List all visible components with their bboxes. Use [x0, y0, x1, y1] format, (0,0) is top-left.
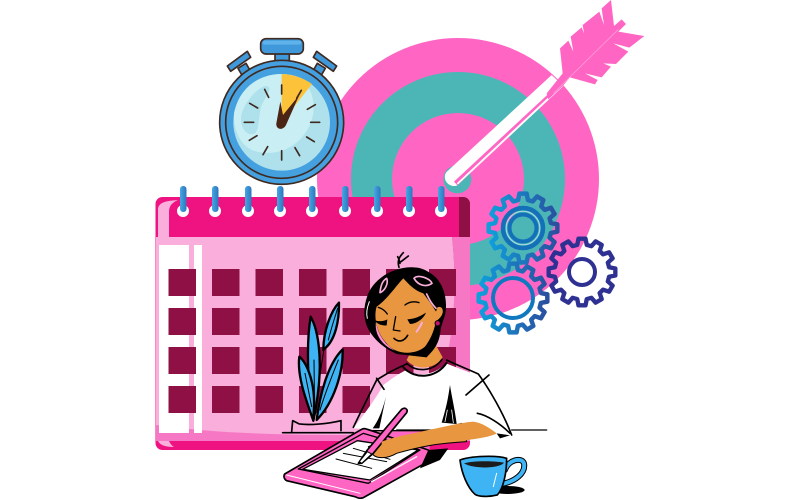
gear: right	[549, 239, 615, 305]
arrow	[443, 0, 644, 193]
plant	[283, 303, 353, 433]
calendar	[156, 186, 470, 450]
stopwatch	[220, 39, 344, 184]
eyes and brows	[378, 302, 419, 314]
blush	[417, 323, 422, 332]
side buttons	[227, 39, 337, 80]
head	[364, 253, 446, 357]
gear: bottom	[479, 264, 547, 332]
coffee cup	[460, 456, 525, 496]
shirt	[353, 363, 512, 435]
ticks	[244, 85, 320, 160]
tablet	[284, 429, 448, 498]
binder holes	[177, 205, 447, 217]
face	[375, 278, 443, 353]
hair highlights	[380, 277, 436, 308]
person torso	[353, 343, 547, 435]
arm	[368, 423, 467, 458]
target board	[317, 38, 599, 320]
yellow time wedge	[282, 74, 312, 122]
hands	[276, 95, 299, 129]
binder rings	[180, 186, 444, 212]
white strips	[159, 245, 189, 433]
table line	[397, 428, 547, 432]
nose and mouth	[393, 317, 400, 331]
neck and collar	[407, 343, 443, 367]
tablet, hand and pen	[284, 408, 467, 498]
gear: top	[489, 194, 557, 262]
pen	[358, 408, 407, 463]
date squares	[168, 269, 456, 413]
forearm and sleeve	[382, 422, 510, 450]
hair	[364, 267, 446, 357]
